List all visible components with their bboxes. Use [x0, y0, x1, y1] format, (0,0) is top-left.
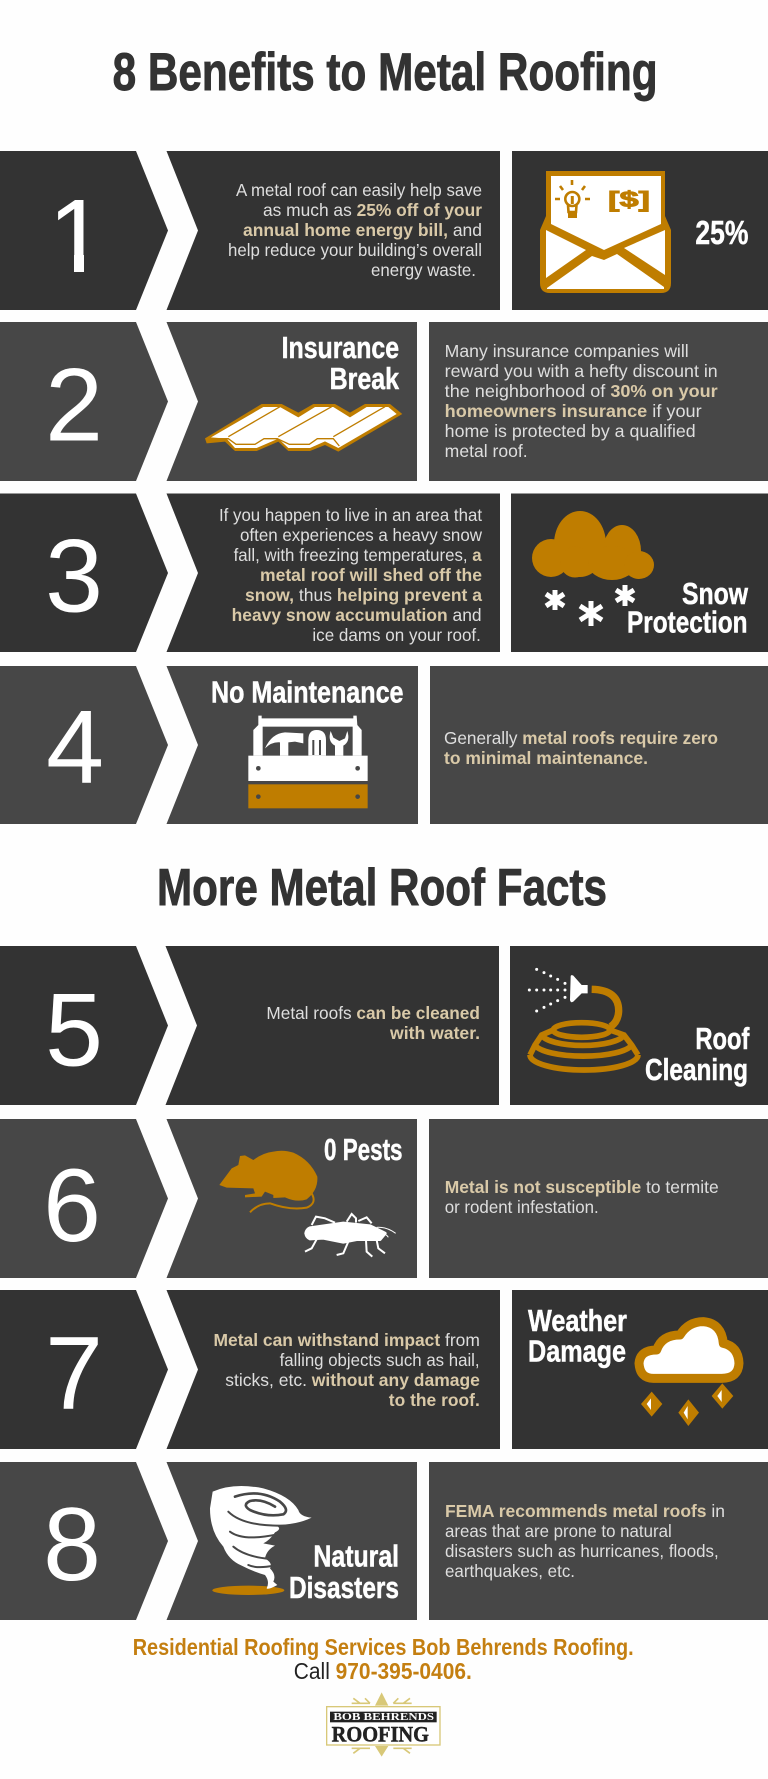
text block: benefit 8: disasters such as hurricanes, floods,: [445, 1541, 719, 1561]
panel: benefit 3: [0, 494, 768, 652]
logo: Bob Behrends Roofing: ROOFING: [332, 1722, 429, 1747]
panel: benefit 4: [0, 666, 768, 824]
text block: benefit 2: metal roof.: [445, 441, 528, 461]
text block: benefit 3: [166, 494, 500, 652]
footer call to action: Call 970-395-0406.: [294, 1658, 472, 1684]
panel: benefit 2: [0, 322, 768, 481]
text block: benefit 8: areas that are prone to natural: [445, 1521, 672, 1541]
icon: hose and nozzle: [528, 968, 638, 1070]
icon: metal roof panel: [205, 404, 402, 452]
panel: weather damage: [512, 1290, 768, 1449]
number 3 chevron: [0, 494, 168, 652]
text block: benefit 3: snow, thus helping prevent a: [245, 585, 482, 605]
number 7 chevron: [0, 1290, 168, 1449]
heading: more metal roof facts: More Metal Roof Facts: [157, 859, 607, 917]
text block: benefit 5: [166, 946, 499, 1105]
number 6 chevron: 6: [43, 1148, 101, 1264]
panel: 0 pests heading and icons: 0 Pests: [324, 1132, 402, 1167]
icon: tornado: [210, 1486, 312, 1595]
text block: benefit 7: Metal can withstand impact from: [214, 1330, 480, 1350]
number 4 chevron: [0, 666, 168, 824]
text block: benefit 7: sticks, etc. without any damage: [225, 1370, 480, 1390]
panel: benefit 6: [0, 1119, 768, 1278]
panel: insurance break heading and icon: Insurance: [282, 330, 399, 365]
text block: benefit 6: [429, 1119, 768, 1278]
icon: snow cloud: [532, 511, 654, 626]
panel: benefit 1: [0, 151, 768, 310]
icon: termite: [305, 1214, 396, 1257]
text block: benefit 6: Metal is not susceptible to termite: [445, 1177, 719, 1197]
text block: benefit 3: heavy snow accumulation and: [232, 605, 482, 625]
stat: 25%: 25%: [695, 214, 748, 251]
number 6 chevron: [0, 1119, 168, 1278]
text block: benefit 2: [429, 322, 768, 481]
number 8 chevron: [0, 1462, 168, 1620]
text block: benefit 1: energy waste.: [371, 260, 476, 280]
icon: envelope with bill: [$]: [608, 187, 650, 212]
number 8 chevron: 8: [43, 1487, 101, 1603]
number 3 chevron: 3: [45, 519, 103, 635]
text block: benefit 2: the neighborhood of 30% on your: [445, 381, 718, 401]
panel: roof cleaning: Roof: [695, 1021, 750, 1056]
text block: benefit 5: with water.: [389, 1023, 480, 1043]
panel: insurance break heading and icon: [166, 322, 417, 481]
icon: toolbox: [248, 716, 368, 808]
text block: benefit 3: If you happen to live in an area that: [219, 505, 482, 525]
text block: benefit 3: metal roof will shed off the: [260, 565, 482, 585]
panel: benefit 7: [0, 1290, 768, 1449]
icon: envelope with bill: [540, 171, 671, 293]
panel: no maintenance heading and icon: No Maintenance: [211, 675, 404, 710]
text block: benefit 2: home is protected by a qualified: [445, 421, 696, 441]
logo: Bob Behrends Roofing: BOB BEHRENDS: [333, 1712, 435, 1723]
footer call to action: [133, 1634, 634, 1684]
number 5 chevron: [0, 946, 168, 1105]
number 7 chevron: 7: [45, 1316, 103, 1432]
text block: benefit 1: [166, 151, 500, 310]
logo: Bob Behrends Roofing: [327, 1692, 440, 1757]
text block: benefit 1: as much as 25% off of your: [263, 200, 482, 220]
number 4 chevron: 4: [46, 690, 104, 806]
text block: benefit 7: falling objects such as hail,: [280, 1350, 480, 1370]
text block: benefit 3: often experiences a heavy snow: [240, 525, 482, 545]
text block: benefit 1: A metal roof can easily help save: [236, 180, 482, 200]
panel: natural disasters heading and icon: Disasters: [289, 1570, 399, 1605]
text block: benefit 2: homeowners insurance if your: [445, 401, 702, 421]
text block: benefit 1: annual home energy bill, and: [243, 220, 482, 240]
number 2 chevron: [0, 322, 168, 481]
panel: weather damage: Damage: [528, 1334, 626, 1369]
panel: natural disasters heading and icon: [166, 1462, 417, 1620]
number 2 chevron: 2: [45, 348, 103, 464]
text block: benefit 2: reward you with a hefty discount in: [445, 361, 718, 381]
text block: benefit 8: [429, 1462, 768, 1620]
panel: insurance break heading and icon: Break: [330, 361, 400, 396]
number 1 chevron: [0, 151, 168, 310]
icon: rain cloud: [639, 1322, 739, 1426]
panel: 0 pests heading and icons: [166, 1119, 417, 1278]
panel: 25% savings icon: [512, 151, 768, 310]
number 1 chevron: 1: [48, 179, 106, 295]
footer call to action: Residential Roofing Services Bob Behrends Roofing.: [133, 1634, 634, 1660]
text block: benefit 5: Metal roofs can be cleaned: [266, 1003, 480, 1023]
panel: snow protection: Snow: [682, 576, 749, 611]
panel: benefit 8: [0, 1462, 768, 1620]
text block: benefit 3: ice dams on your roof.: [312, 625, 481, 645]
panel: roof cleaning: [510, 946, 768, 1105]
text block: benefit 3: fall, with freezing temperatures, a: [234, 545, 482, 565]
text block: benefit 8: FEMA recommends metal roofs in: [445, 1501, 725, 1521]
panel: weather damage: Weather: [528, 1303, 627, 1338]
number 5 chevron: 5: [45, 973, 103, 1089]
icon: rat: [219, 1151, 317, 1212]
text block: benefit 4: Generally metal roofs require zero: [444, 728, 718, 748]
panel: natural disasters heading and icon: Natural: [313, 1539, 399, 1574]
text block: benefit 1: help reduce your building’s overall: [228, 240, 482, 260]
text block: benefit 7: to the roof.: [389, 1390, 480, 1410]
text block: benefit 2: Many insurance companies will: [445, 341, 689, 361]
panel: snow protection: [511, 494, 768, 652]
text block: benefit 8: earthquakes, etc.: [445, 1561, 575, 1581]
text block: benefit 6: or rodent infestation.: [445, 1197, 599, 1217]
text block: benefit 4: to minimal maintenance.: [444, 748, 648, 768]
panel: benefit 5: [0, 946, 768, 1105]
text block: benefit 7: [166, 1290, 500, 1449]
panel: no maintenance heading and icon: [166, 666, 418, 824]
text block: benefit 4: [430, 666, 768, 824]
